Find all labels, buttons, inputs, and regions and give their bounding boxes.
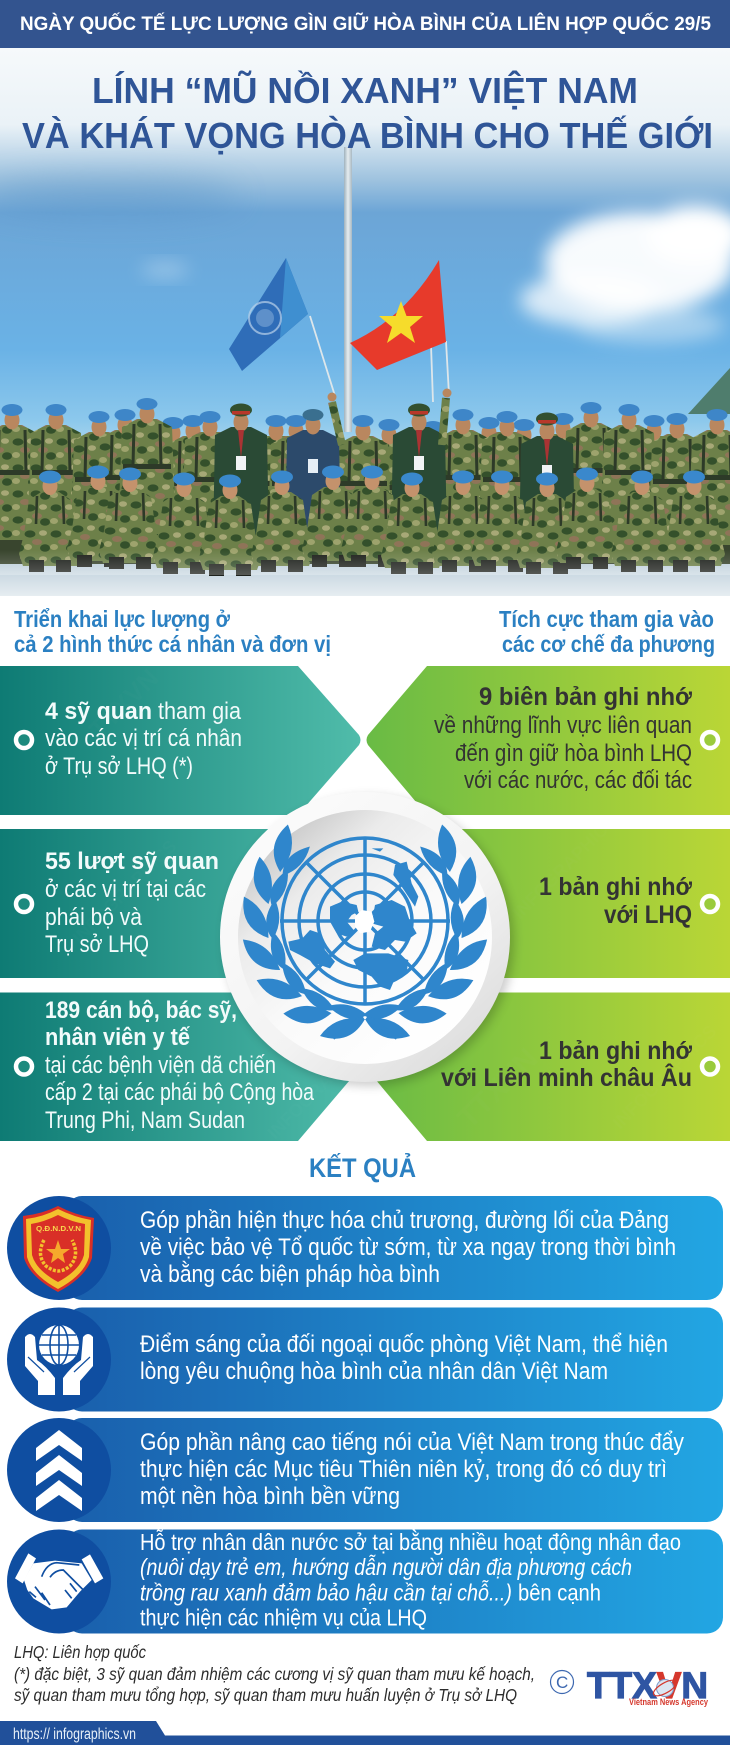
panel: left row 2, officer rotations: ở các vị trí tại các — [45, 876, 206, 903]
main title: VÀ KHÁT VỌNG HÒA BÌNH CHO THẾ GIỚI — [22, 114, 713, 156]
flagpole — [344, 147, 352, 432]
watermarks: INFOGRAPHICS — [264, 1031, 375, 1143]
icon: army shield — [23, 1206, 94, 1292]
panel: right row 3, memorandum with EU — [365, 992, 730, 1141]
footnotes: (*) đặc biệt, 3 sỹ quan đảm nhiệm các cương vị sỹ quan tham mưu kế hoạch, — [14, 1664, 535, 1684]
watermarks: TTXVN — [452, 1042, 544, 1135]
raised arms — [328, 388, 452, 445]
UN emblem — [241, 823, 489, 1039]
copyright mark — [550, 1670, 574, 1694]
Vietnam flag — [350, 260, 446, 370]
globe grid — [280, 838, 450, 1004]
panel: left row 1, officers at headquarters: tham gia — [158, 698, 242, 725]
bullet — [16, 896, 32, 912]
result bar 3: một nền hòa bình bền vững — [140, 1483, 400, 1510]
result bar 1: và bằng các biện pháp hòa bình — [140, 1261, 440, 1288]
bullet — [16, 1058, 32, 1074]
building roof at right edge — [688, 368, 730, 414]
panel: left row 2, officer rotations: Trụ sở LHQ — [45, 931, 149, 958]
panel: left row 3, medical staff — [0, 992, 361, 1141]
result bar 2: Điểm sáng của đối ngoại quốc phòng Việt Nam, thể hiện — [140, 1331, 668, 1358]
icon: hands holding globe — [25, 1325, 93, 1395]
bullet — [702, 896, 718, 912]
icon: rising chevrons — [36, 1430, 82, 1511]
subheading left — [14, 606, 331, 657]
icon: army shield: Q.Đ.N.D.V.N — [36, 1224, 81, 1233]
panel: right row 1, memoranda: với các nước, các đối tác — [464, 767, 692, 794]
result bar 3: thực hiện các Mục tiêu Thiên niên kỷ, trong đó có duy trì — [140, 1456, 667, 1483]
bullet — [702, 732, 718, 748]
panel: right row 2, memorandum with UN: với LHQ — [604, 901, 692, 929]
result bar 4: bên cạnh — [518, 1580, 601, 1606]
result bar 2: lòng yêu chuộng hòa bình của nhân dân Việt Nam — [140, 1358, 608, 1385]
panel: right row 1, memoranda: đến gìn giữ hòa bình LHQ — [455, 740, 692, 767]
panel: left row 1, officers at headquarters: ở Trụ sở LHQ (*) — [45, 753, 193, 780]
footer bar: https:// infographics.vn — [13, 1726, 136, 1743]
hero photo: peacekeepers under the flags — [0, 48, 730, 596]
section heading: results: KẾT QUẢ — [309, 1151, 416, 1183]
result bar 4: trồng rau xanh đảm bảo hậu cần tại chỗ...) — [140, 1578, 512, 1606]
panel: left row 3, medical staff: Trung Phi, Nam Sudan — [45, 1107, 245, 1134]
flag staffs — [310, 316, 449, 402]
panel: left row 2, officer rotations — [0, 829, 361, 978]
footnotes: LHQ: Liên hợp quốc — [14, 1642, 146, 1662]
main title: LÍNH “MŨ NỒI XANH” VIỆT NAM — [92, 69, 638, 111]
panel: right row 1, memoranda: 9 biên bản ghi nhớ — [479, 683, 692, 711]
TTXVN logo: Vietnam News Agency — [629, 1697, 708, 1707]
top banner — [0, 0, 730, 48]
icon: handshake — [15, 1553, 103, 1609]
main title — [22, 69, 713, 156]
subheading left: Triển khai lực lượng ở — [14, 606, 231, 632]
copyright mark: C — [556, 1673, 568, 1692]
watermarks: TTXVN — [83, 663, 165, 744]
result bar 4: (nuôi dạy trẻ em, hướng dẫn người dân địa phương cách — [140, 1553, 632, 1580]
dark backing behind the troops — [0, 452, 730, 564]
result bar 4 — [7, 1529, 723, 1634]
result bar 3 — [7, 1418, 723, 1522]
ground — [0, 564, 730, 596]
result bar 1 — [7, 1196, 723, 1300]
panel: left row 1, officers at headquarters — [0, 666, 360, 815]
footnotes: sỹ quan tham mưu tổng hợp, sỹ quan tham mưu huấn luyện ở Trụ sở LHQ — [14, 1685, 517, 1705]
panel: right row 2, memorandum with UN: 1 bản ghi nhớ — [539, 873, 692, 901]
UN emblem disc — [220, 792, 514, 1086]
panel: right row 3, memorandum with EU: 1 bản ghi nhớ — [539, 1037, 692, 1065]
panel: right row 3, memorandum with EU: với Liên minh châu Âu — [441, 1062, 692, 1092]
panel: right row 1, memoranda: về những lĩnh vực liên quan — [434, 712, 692, 739]
panel: left row 1, officers at headquarters: 4 sỹ quan — [45, 698, 152, 725]
result bar 2 — [7, 1308, 723, 1412]
panel: left row 3, medical staff: tại các bệnh viện dã chiến — [45, 1052, 276, 1079]
panel: right row 2, memorandum with UN — [365, 829, 730, 978]
panel: right row 1, memoranda — [366, 666, 730, 815]
watermarks: INFOGRAPHICS — [509, 811, 620, 923]
panel: left row 3, medical staff: cấp 2 tại các phái bộ Cộng hòa — [45, 1079, 315, 1106]
watermarks: INFOGRAPHICS — [69, 836, 180, 948]
UN flag — [229, 258, 308, 371]
top banner: NGÀY QUỐC TẾ LỰC LƯỢNG GÌN GIỮ HÒA BÌNH CỦA LIÊN HỢP QUỐC 29/5 — [20, 13, 711, 35]
watermarks — [69, 663, 720, 1143]
footnotes — [14, 1642, 535, 1705]
continents — [288, 848, 418, 990]
footer bar — [0, 1721, 730, 1745]
cloud on the right — [520, 205, 730, 343]
watermarks: INFOGRAPHICS — [609, 1021, 720, 1133]
subheading left: cả 2 hình thức cá nhân và đơn vị — [14, 631, 331, 657]
peacekeepers, back row — [0, 398, 730, 557]
panel: left row 2, officer rotations: phái bộ và — [45, 904, 143, 931]
panel: left row 3, medical staff: nhân viên y tế — [45, 1024, 191, 1051]
panel: left row 3, medical staff: 189 cán bộ, bác sỹ, — [45, 997, 237, 1024]
panel: left row 2, officer rotations: 55 lượt sỹ quan — [45, 848, 219, 875]
bullet — [702, 1058, 718, 1074]
bullet — [16, 732, 32, 748]
TTXVN logo: TTXVN — [587, 1665, 708, 1706]
result bar 4: thực hiện các nhiệm vụ của LHQ — [140, 1604, 427, 1630]
subheading right — [499, 606, 715, 657]
peacekeepers, front row — [19, 466, 725, 576]
panel: left row 1, officers at headquarters: vào các vị trí cá nhân — [45, 725, 242, 752]
olive wreath — [241, 823, 367, 1039]
